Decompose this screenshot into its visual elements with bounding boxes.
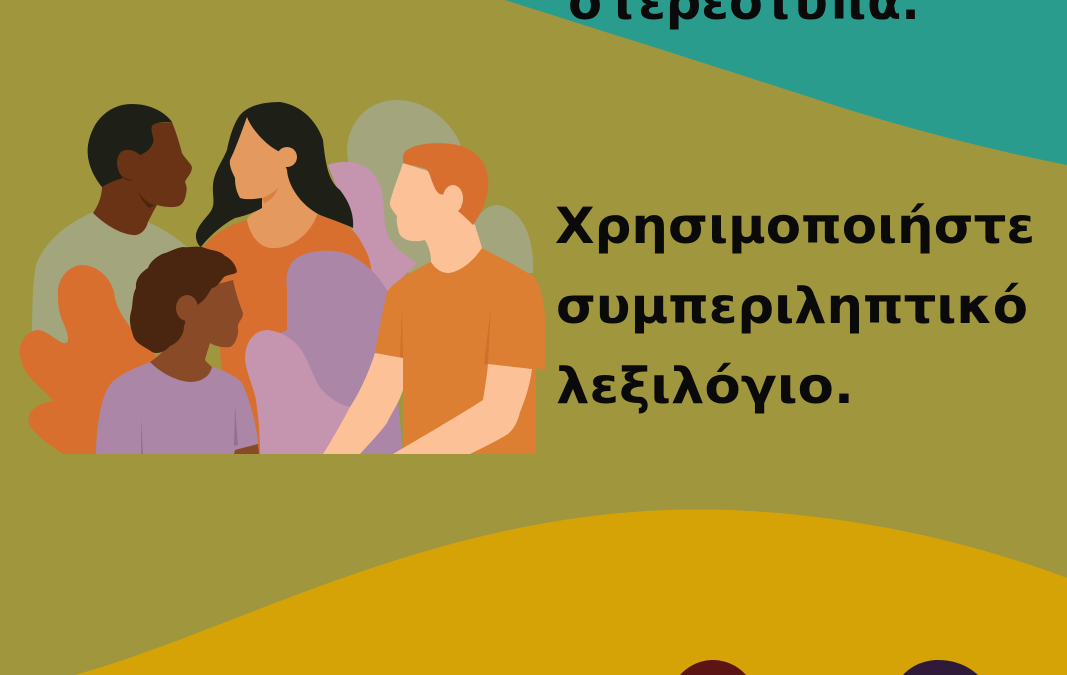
- dark red figure head, cut off at bottom: [680, 660, 746, 675]
- text: main message: λεξιλόγιο.: [556, 357, 854, 415]
- back sage foliage: [347, 100, 533, 275]
- illustration: group of people: [20, 100, 545, 454]
- text: main message: Χρησιμοποιήστε: [555, 197, 1035, 255]
- person 3: child in purple shirt: [96, 247, 259, 454]
- yellow wave, bottom: [75, 509, 1067, 675]
- orange foliage, front left: [20, 265, 157, 454]
- back pink foliage: [328, 162, 417, 292]
- text: main message: [555, 197, 1035, 415]
- person 2: woman in orange top: [196, 102, 380, 454]
- person 1: man in sage shirt: [32, 104, 192, 350]
- text: main message: συμπεριληπτικό: [556, 277, 1028, 335]
- pink foliage, front centre: [245, 330, 350, 454]
- teal wave, top right: [505, 0, 1067, 165]
- dark purple figure head, cut off at bottom: [903, 660, 978, 675]
- purple foliage, centre: [280, 250, 402, 454]
- person 4: man in orange t-shirt: [323, 143, 545, 454]
